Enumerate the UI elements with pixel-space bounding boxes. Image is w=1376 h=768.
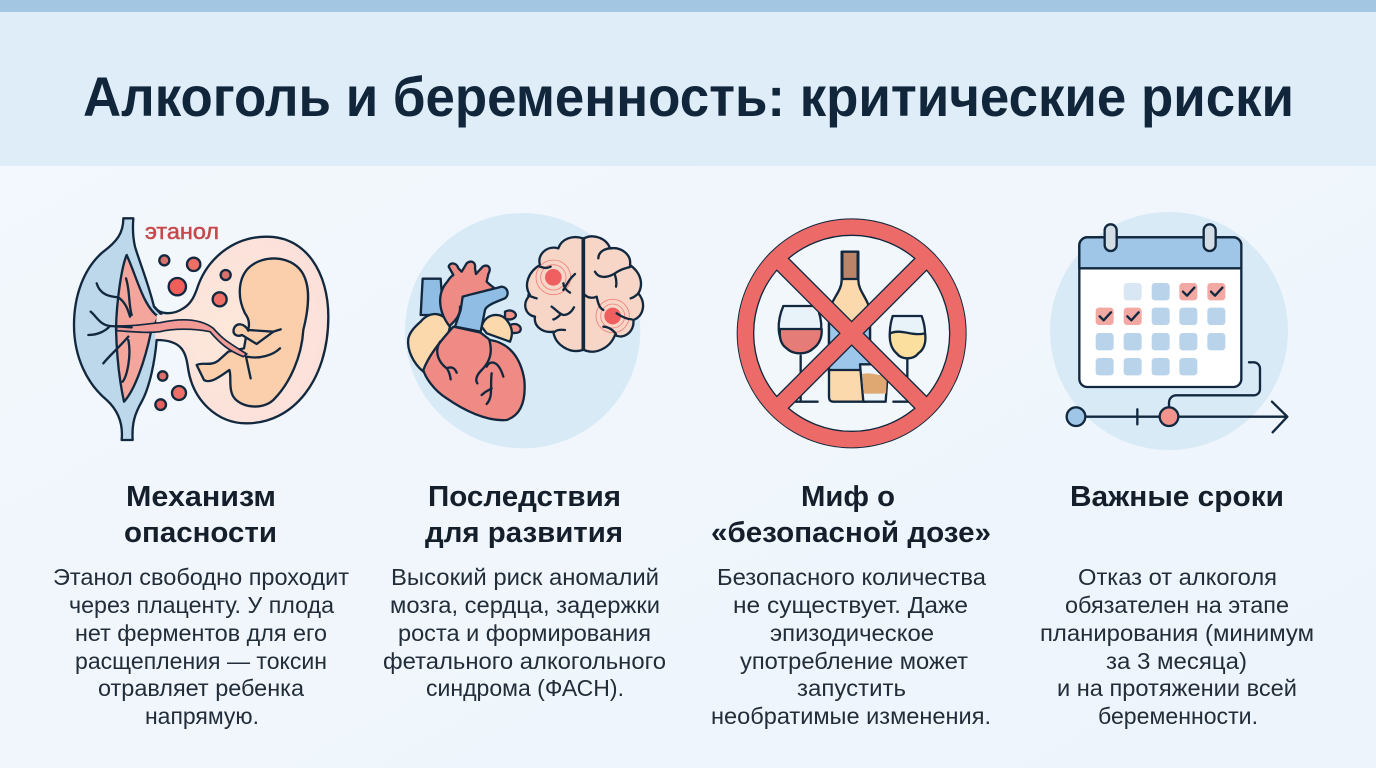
- body text: мозга, сердца, задержки: [390, 592, 660, 618]
- top accent band: [0, 0, 1376, 12]
- body text: и на протяжении всей: [1057, 675, 1297, 701]
- heading: опасности: [124, 517, 277, 549]
- heading: Важные сроки: [1070, 481, 1284, 513]
- timeline arrow: [1067, 362, 1287, 432]
- body text: обязателен на этапе: [1065, 592, 1289, 618]
- heading: Механизм: [126, 481, 276, 513]
- body text: [53, 564, 349, 729]
- body text: необратимые изменения.: [711, 703, 991, 729]
- body text: расщепления — токсин: [75, 648, 327, 674]
- heading: «безопасной дозе»: [711, 517, 991, 549]
- body text: за 3 месяца): [1106, 648, 1247, 674]
- body text: употребление может: [740, 648, 968, 674]
- body text: эпизодическое: [770, 620, 934, 646]
- body text: Этанол свободно проходит: [53, 564, 349, 590]
- label: этанол: этанол: [145, 219, 219, 244]
- icon: placenta, umbilical cord and fetus: [74, 218, 328, 440]
- calendar: [1079, 224, 1241, 387]
- body text: роста и формирования: [398, 620, 651, 646]
- icon: shot glass: [860, 364, 888, 402]
- body text: [711, 564, 991, 729]
- panel: механизм опасности: [53, 218, 349, 729]
- icon: wine bottle: [829, 252, 870, 402]
- body text: синдрома (ФАСН).: [426, 675, 624, 701]
- icon: prohibited alcohol: [745, 227, 958, 440]
- title: Алкоголь и беременность: критические риски: [83, 65, 1294, 128]
- body text: отравляет ребенка: [98, 675, 304, 701]
- body text: Отказ от алкоголя: [1078, 564, 1277, 590]
- heading: Последствия: [428, 481, 621, 513]
- body text: фетального алкогольного: [383, 648, 666, 674]
- heading: [711, 481, 991, 549]
- panel: последствия для развития: [383, 213, 666, 701]
- icon: white wine glass: [890, 316, 925, 402]
- header band: [0, 12, 1376, 166]
- body text: беременности.: [1098, 703, 1258, 729]
- body text: [383, 564, 666, 701]
- body text: Высокий риск аномалий: [391, 564, 659, 590]
- body text: через плаценту. У плода: [69, 592, 334, 618]
- icon: heart and brain: [405, 213, 643, 448]
- heading: Миф о: [801, 481, 895, 513]
- heading: [425, 481, 623, 549]
- panel: важные сроки: [1040, 212, 1314, 729]
- panel: миф о безопасной дозе: [711, 227, 991, 729]
- icon: calendar and timeline: [1050, 212, 1288, 450]
- body text: планирования (минимум: [1040, 620, 1314, 646]
- body text: не существует. Даже: [733, 592, 968, 618]
- heading: для развития: [425, 517, 623, 549]
- body text: Безопасного количества: [717, 564, 986, 590]
- heading: [124, 481, 277, 549]
- body text: нет ферментов для его: [75, 620, 327, 646]
- body text: напрямую.: [145, 703, 259, 729]
- body text: [1040, 564, 1314, 729]
- icon: red wine glass: [779, 306, 822, 402]
- body text: запустить: [797, 675, 906, 701]
